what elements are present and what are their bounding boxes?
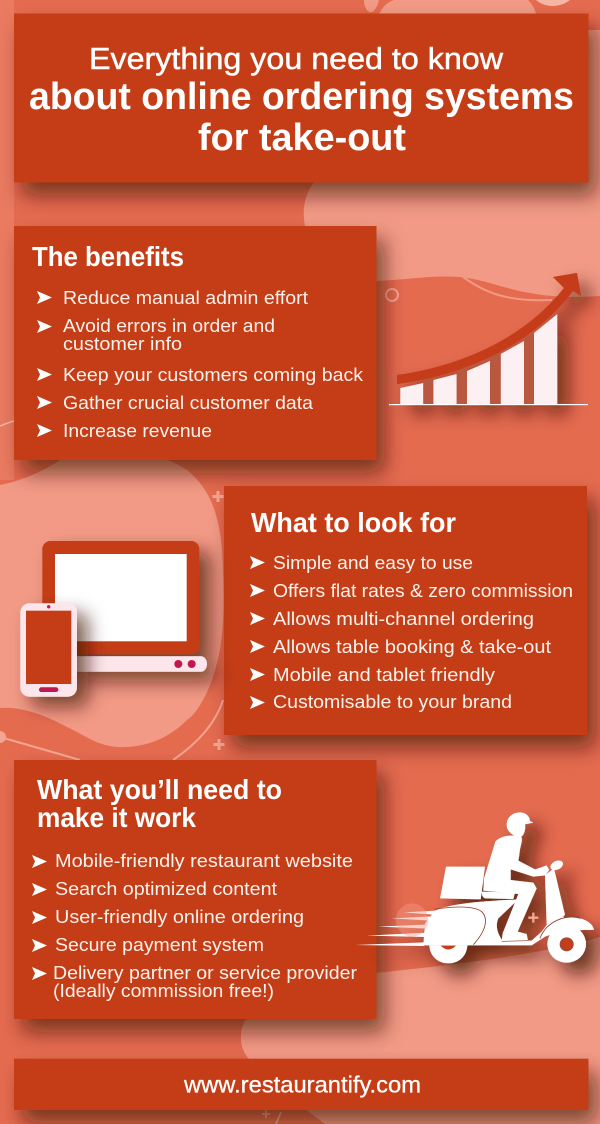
list: what to look for: Customisable to your brand xyxy=(273,691,512,712)
panel: what to look for xyxy=(224,486,587,735)
list: what to look for: Allows table booking & take-out xyxy=(273,636,551,657)
list: benefits: Keep your customers coming back xyxy=(63,364,364,385)
icon: tablet and phone xyxy=(20,541,207,697)
panel: website footer xyxy=(14,1059,588,1110)
panel: the benefits xyxy=(14,226,376,460)
list: what you'll need xyxy=(32,850,357,1001)
list: what you'll need: Secure payment system xyxy=(55,934,264,955)
text: website url: www.restaurantify.com xyxy=(183,1072,421,1098)
list: benefits: Reduce manual admin effort xyxy=(63,287,308,308)
list: benefits: Avoid errors in order and xyxy=(63,315,275,336)
icon: growth bar chart with arrow xyxy=(389,273,588,405)
icon: delivery scooter xyxy=(355,812,594,963)
icon: tablet xyxy=(42,541,207,672)
heading: what to look for: What to look for xyxy=(251,507,456,538)
list: what you'll need: Search optimized content xyxy=(55,878,277,899)
heading: title line 1: Everything you need to know xyxy=(89,41,504,76)
list: what you'll need: Mobile-friendly restaurant website xyxy=(55,850,353,871)
heading: title line 2: about online ordering systems xyxy=(29,76,574,118)
list: benefits xyxy=(37,287,364,441)
list: benefits: Gather crucial customer data xyxy=(63,392,314,413)
list: benefits: customer info xyxy=(63,333,182,354)
heading: what you'll need: What you’ll need to xyxy=(37,774,282,805)
list: benefits: Increase revenue xyxy=(63,420,212,441)
heading: what you'll need xyxy=(37,774,282,833)
heading: what you'll need: make it work xyxy=(37,802,196,833)
list: what to look for: Allows multi-channel ordering xyxy=(273,608,534,629)
list: what you'll need: (Ideally commission free!) xyxy=(53,980,274,1001)
list: what to look for: Mobile and tablet friendly xyxy=(273,664,496,685)
icon: phone xyxy=(20,603,77,697)
list: what you'll need: Delivery partner or service provider xyxy=(53,962,357,983)
list: what to look for: Simple and easy to use xyxy=(273,552,473,573)
list: what to look for xyxy=(250,552,573,712)
panel: title xyxy=(14,14,588,182)
panel: what you'll need xyxy=(14,760,376,1019)
heading: the benefits: The benefits xyxy=(32,241,184,272)
list: what you'll need: User-friendly online ordering xyxy=(55,906,304,927)
list: what to look for: Offers flat rates & zero commission xyxy=(273,580,573,601)
heading: title line 3: for take-out xyxy=(198,117,406,159)
